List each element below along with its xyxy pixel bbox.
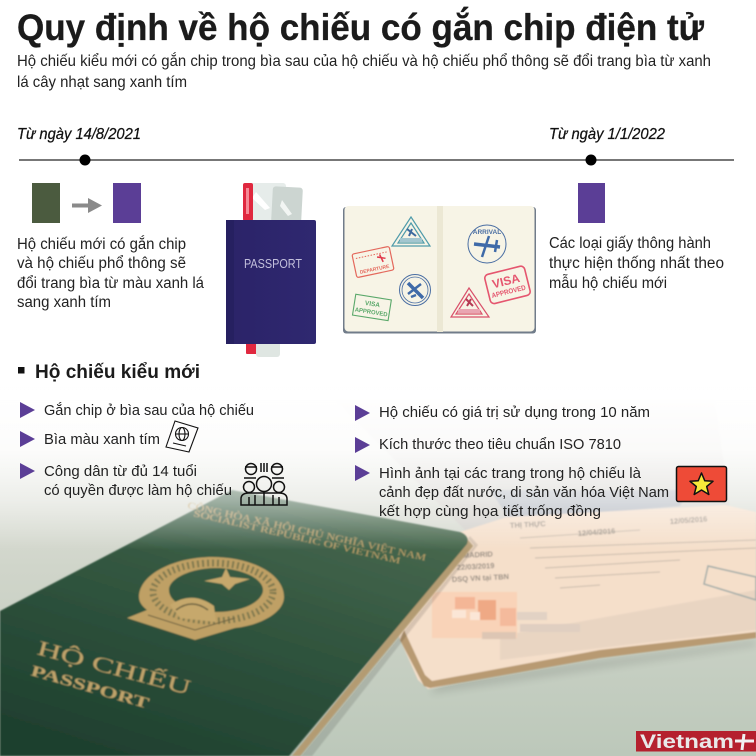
cover lettering: SOCIALIST REPUBLIC OF VIETNAM [193,508,401,566]
list: left features: Bìa màu xanh tím [44,431,160,448]
list: left features: Công dân từ đủ 14 tuổi [44,463,197,480]
cover lettering [29,499,428,713]
list: left features [20,402,254,499]
list: right features: Kích thước theo tiêu chuẩn ISO 7810 [379,436,621,453]
blurred mosaic patch on the visa page [432,592,580,639]
cover lettering: PASSPORT [29,663,152,713]
timeline [17,126,734,166]
icon: group of people [241,463,287,505]
stamp: visa approved green: VISA [364,300,381,309]
text: left timeline note [17,236,204,311]
cover lettering: HỘ CHIẾU [35,636,194,700]
text: right timeline note: thực hiện thống nhất theo [549,255,724,272]
stamp: arrival [468,225,506,263]
logo: Vietnam+: Vietnam [640,732,734,753]
stamp: round plane [400,274,430,306]
list: right features [355,404,669,520]
cover colour change: green to purple [32,183,141,223]
list: right features: Hình ảnh tại các trang trong hộ chiếu là [379,465,642,482]
icon: passport outline [166,421,198,452]
list: left features: Gắn chip ở bìa sau của hộ chiếu [44,402,254,419]
heading: new passport type: Hộ chiếu kiểu mới [35,362,200,383]
stamp: visa approved red: VISA [491,271,522,291]
text: right timeline note: mẫu hộ chiếu mới [549,275,667,292]
gold emblem [127,557,284,640]
text: left timeline note: đổi trang bìa từ màu xanh lá [17,275,204,292]
inner visa pages of the open passport: 22/03/2019 [457,561,495,572]
stamp: departure: DEPARTURE [359,264,391,276]
stamp: arrival: ARRIVAL [473,229,501,236]
inner visa pages of the open passport [335,400,756,694]
list: right features: kết hợp cùng họa tiết trống đồng [379,503,601,520]
text: left timeline note: và hộ chiếu phổ thông sẽ [17,255,186,272]
list: right features: Hộ chiếu có giá trị sử dụng trong 10 năm [379,404,650,421]
inner visa pages of the open passport: THỊ THỰC [510,519,546,530]
icon: closed purple passport with tickets [226,183,316,357]
cover lettering: CỘNG HÒA XÃ HỘI CHỦ NGHĨA VIỆT NAM [186,499,428,564]
icon: Vietnam flag [676,466,726,502]
text: left timeline note: Hộ chiếu mới có gắn chip [17,236,186,253]
stamp: visa approved green: APPROVED [354,307,388,319]
stamp: departure [352,246,394,278]
logo: Vietnam+ [636,731,756,753]
stamp: visa approved green [353,294,391,321]
purple cover swatch [578,183,605,223]
text: right timeline note: Các loại giấy thông hành [549,235,711,252]
inner visa pages of the open passport: MADRID [463,549,494,560]
stamp: visa approved red [484,265,531,304]
title: Quy định về hộ chiếu có gắn chip điện tử [17,6,704,48]
list: left features: có quyền được làm hộ chiếu [44,482,232,499]
green passport cover [0,490,478,756]
stamp: triangle blue [392,217,430,246]
text: right timeline note [549,235,724,292]
stamp: triangle red [451,288,489,317]
inner visa pages of the open passport: 12/05/2016 [670,514,708,526]
stamp: visa approved red: APPROVED [491,285,527,300]
timeline: Từ ngày 1/1/2022 [549,126,665,143]
icon: closed purple passport with tickets: PASSPORT [244,257,302,271]
inner visa pages of the open passport: 12/04/2016 [578,526,616,538]
inner visa pages of the open passport: DSQ VN tại TBN [452,572,509,584]
list: right features: cảnh đẹp đất nước, di sản văn hóa Việt Nam [379,484,669,501]
subtitle [17,51,711,91]
icon: open passport with stamps [343,206,536,334]
text: left timeline note: sang xanh tím [17,294,111,311]
subtitle: lá cây nhạt sang xanh tím [17,74,187,91]
subtitle: Hộ chiếu kiểu mới có gắn chip trong bìa sau của hộ chiếu và hộ chiếu phổ thông sẽ đổi trang bìa từ xanh [17,51,711,70]
timeline: Từ ngày 14/8/2021 [17,126,141,143]
